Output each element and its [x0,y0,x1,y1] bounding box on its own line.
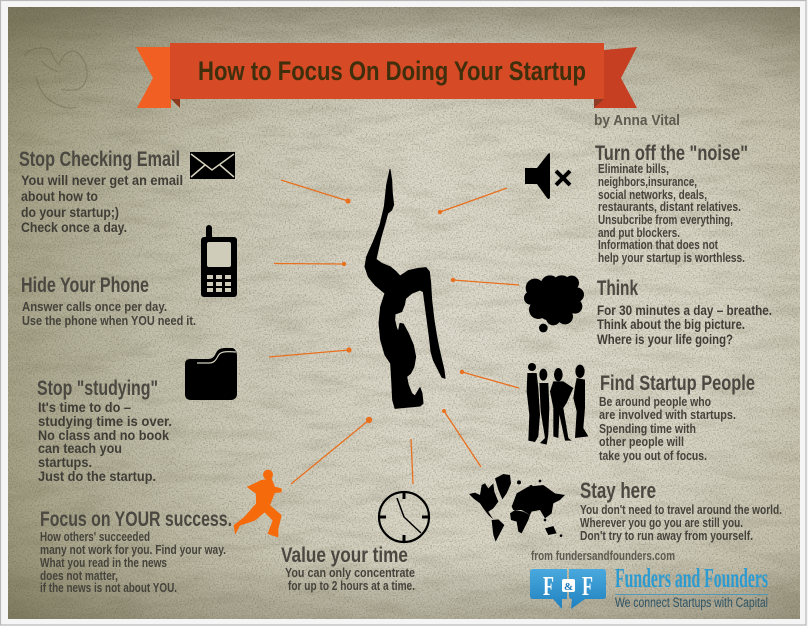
body text [38,399,172,484]
body text [597,302,772,347]
body text: Be around people who [599,394,711,409]
line: people [460,370,519,388]
panel: turn off the noise [525,142,748,265]
icon: envelope [190,152,235,179]
body text: What you read in the news [40,555,167,570]
icon: thought cloud [524,275,584,332]
body text: take you out of focus. [599,448,707,463]
body text: For 30 minutes a day – breathe. [597,302,772,318]
ribbon body [170,43,604,99]
body text: and put blockers. [598,225,680,240]
body text: Spending time with [599,421,696,436]
line: stay here [442,409,481,467]
logo mark: speech bubbles [530,569,606,609]
body text: help your startup is worthless. [598,250,745,265]
body text: about how to [21,188,98,204]
body text: neighbors,insurance, [598,174,697,189]
body text: Unsubcribe from everything, [598,212,733,227]
body text: Eliminate bills, [598,161,669,176]
heading: Stop "studying" [37,377,158,400]
body text: Information that does not [598,237,719,252]
logo mark: speech bubbles: & [564,581,573,593]
body text: You will never get an email [21,172,183,188]
logo: funders and founders [530,563,768,610]
heading: Stop Checking Email [19,148,180,171]
line: time [411,439,413,484]
line: think [451,278,519,285]
body text [40,529,226,595]
icon: mobile phone [201,225,237,297]
panel: find startup people [527,363,755,463]
body text: do your startup;) [21,204,119,220]
panel: think [524,275,772,347]
body text: can teach you [38,440,122,456]
line: email [281,180,351,204]
line: phone [274,262,346,266]
heading: Find Startup People [600,372,755,395]
line: studying [269,347,352,357]
logo tagline: We connect Startups with Capital [615,595,768,610]
right ribbon tail [594,47,637,108]
body text: Check once a day. [21,219,127,235]
logo mark: speech bubbles: F [582,571,593,601]
source line: from fundersandfounders.com [531,548,675,563]
body text: if the news is not about YOU. [40,580,177,595]
panel: stop checking email [19,148,235,235]
body text [22,299,196,328]
title banner [136,43,637,108]
line: noise [438,188,507,214]
body text: Wherever you go you are still you. [580,515,743,530]
panel: stay here [469,474,782,543]
ribbon folds [171,99,604,108]
left ribbon tail [136,47,171,108]
icon: world map [469,474,565,542]
icon: muted speaker [525,153,570,199]
body text: Think about the big picture. [597,316,745,332]
body text: Just do the startup. [38,468,156,484]
body text [598,161,745,265]
body text: How others' succeeded [40,529,150,544]
body text: It's time to do – [38,399,131,415]
body text: social networks, deals, [598,187,707,202]
body text: studying time is over. [38,413,172,429]
body text: Don't try to run away from yourself. [580,528,753,543]
body text [599,394,736,463]
central figure silhouette [365,169,445,408]
icon: folder [185,348,237,400]
heading: Value your time [281,544,408,567]
heading: Think [597,277,638,300]
body text: No class and no book [38,427,169,443]
body text [21,172,183,235]
body text: Where is your life going? [597,331,733,347]
body text: You can only concentrate [285,565,415,580]
panel: value your time [281,492,429,593]
body text [580,502,782,543]
heading: Stay here [580,478,656,503]
body text: Answer calls once per day. [22,299,167,314]
body text [285,565,415,593]
body text: many not work for you. Find your way. [40,542,226,557]
panel: focus on your success [40,470,281,595]
heading: Hide Your Phone [21,274,149,297]
body text: for up to 2 hours at a time. [288,578,415,593]
body text: does not matter, [40,568,118,583]
panel: hide your phone [21,225,237,328]
body text: startups. [38,454,92,470]
title: How to Focus On Doing Your Startup [198,56,586,86]
body text: Use the phone when YOU need it. [22,313,196,328]
icon: runner [234,470,281,537]
heading: Turn off the "noise" [595,142,748,165]
body text: are involved with startups. [599,407,736,422]
heading: Focus on YOUR success. [40,508,232,531]
line: success [291,417,372,484]
icon: clock [379,492,429,542]
icon: group of people [527,363,588,445]
logo mark: speech bubbles: F [543,571,554,601]
connector lines [269,180,519,484]
body text: restaurants, distant relatives. [598,199,741,214]
body text: other people will [599,434,684,449]
panel: stop studying [37,348,237,484]
byline: by Anna Vital [594,112,680,129]
